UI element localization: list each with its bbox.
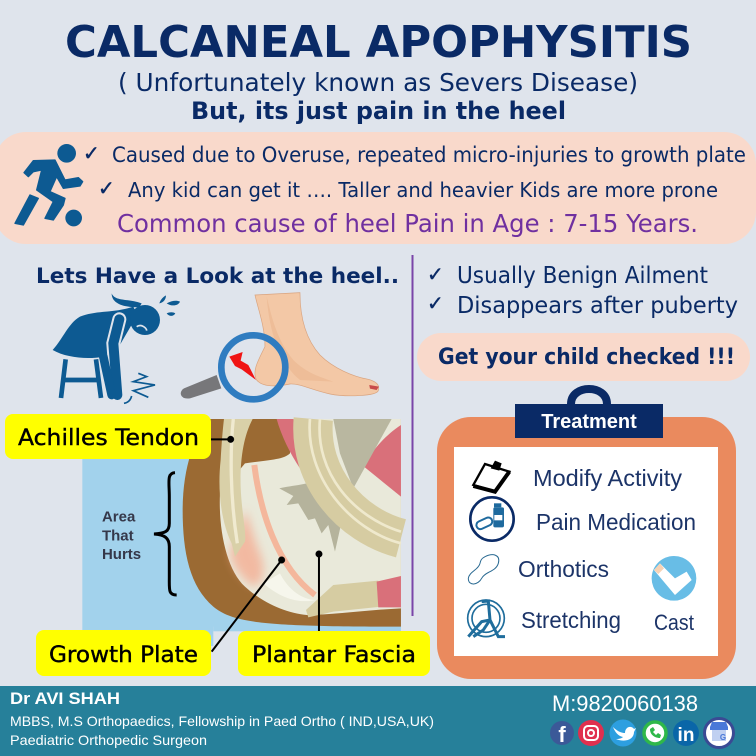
icon: pills <box>470 497 514 541</box>
qualifications: MBBS, M.S Orthopaedics, Fellowship in Paed Ortho ( IND,USA,UK) <box>10 713 434 729</box>
panel: heel anatomy diagram <box>82 419 403 652</box>
pointer: plantar fascia <box>316 551 322 632</box>
tagline: But, its just pain in the heel <box>191 97 566 125</box>
age callout: Common cause of heel Pain in Age : 7-15 Years. <box>117 209 698 238</box>
text block: prognosis: Disappears after puberty <box>457 293 738 319</box>
icon: twitter <box>610 720 636 746</box>
subtitle: ( Unfortunately known as Severs Disease) <box>118 68 638 97</box>
treatment heading: Treatment <box>541 411 637 433</box>
icon: google my business <box>704 718 734 748</box>
text block: prognosis: Usually Benign Ailment <box>457 263 708 289</box>
footer <box>0 686 756 756</box>
icon: cast <box>652 556 696 601</box>
label: Growth Plate <box>36 630 211 676</box>
label: area that hurts: That <box>102 528 134 545</box>
item: modify activity: Modify Activity <box>533 465 682 491</box>
icon: facebook <box>550 721 574 747</box>
heading: look at the heel: Lets Have a Look at the heel.. <box>36 264 399 288</box>
pointer: growth plate <box>212 557 285 652</box>
text block: prognosis: ✓ <box>427 291 444 315</box>
icon: stretching hands <box>468 600 505 637</box>
icon: person holding heel on stool <box>53 293 180 403</box>
check mark 1: ✓ <box>83 141 100 165</box>
item: pain medication: Pain Medication <box>536 509 696 535</box>
item: orthotics: Orthotics <box>518 556 609 582</box>
clipboard hanger <box>571 389 607 404</box>
check mark 2: ✓ <box>98 176 115 200</box>
treatment heading <box>515 404 663 438</box>
icon: foot under magnifying glass <box>181 293 379 399</box>
icon: running child with ball <box>15 144 83 226</box>
phone number: M:9820060138 <box>552 691 698 716</box>
callout: get your child checked <box>417 333 750 381</box>
icon: clipboard <box>473 461 509 492</box>
item: cast: Cast <box>654 610 694 635</box>
icon: facebook: f <box>558 722 566 747</box>
doctor name: Dr AVI SHAH <box>10 689 120 708</box>
icon: insole <box>468 555 499 584</box>
speciality: Paediatric Orthopedic Surgeon <box>10 732 207 748</box>
divider <box>412 255 414 616</box>
icon: linkedin: in <box>678 725 694 746</box>
text block: prognosis: ✓ <box>427 262 444 286</box>
label: Achilles Tendon: Achilles Tendon <box>18 426 199 451</box>
icon: whatsapp <box>644 722 666 744</box>
bracket <box>154 473 177 595</box>
panel: treatment <box>437 389 736 679</box>
icon: linkedin <box>673 720 699 746</box>
text block: prognosis <box>427 262 738 319</box>
label: Plantar Fascia: Plantar Fascia <box>252 643 416 668</box>
title: CALCANEAL APOPHYSITIS <box>65 17 692 68</box>
callout: get your child checked: Get your child checked !!! <box>438 345 735 370</box>
icon: instagram <box>578 720 604 746</box>
cause line 2: Any kid can get it …. Taller and heavier Kids are more prone <box>128 178 718 202</box>
label: Plantar Fascia <box>238 631 430 676</box>
label: area that hurts: Area <box>102 509 136 526</box>
item: stretching: Stretching <box>521 607 621 633</box>
label: Growth Plate: Growth Plate <box>49 643 198 668</box>
panel: causes <box>0 132 756 244</box>
pointer: achilles tendon <box>211 436 234 443</box>
label: Achilles Tendon <box>5 414 211 459</box>
label: area that hurts: Hurts <box>102 546 141 563</box>
icon: google my business: G <box>720 733 726 742</box>
